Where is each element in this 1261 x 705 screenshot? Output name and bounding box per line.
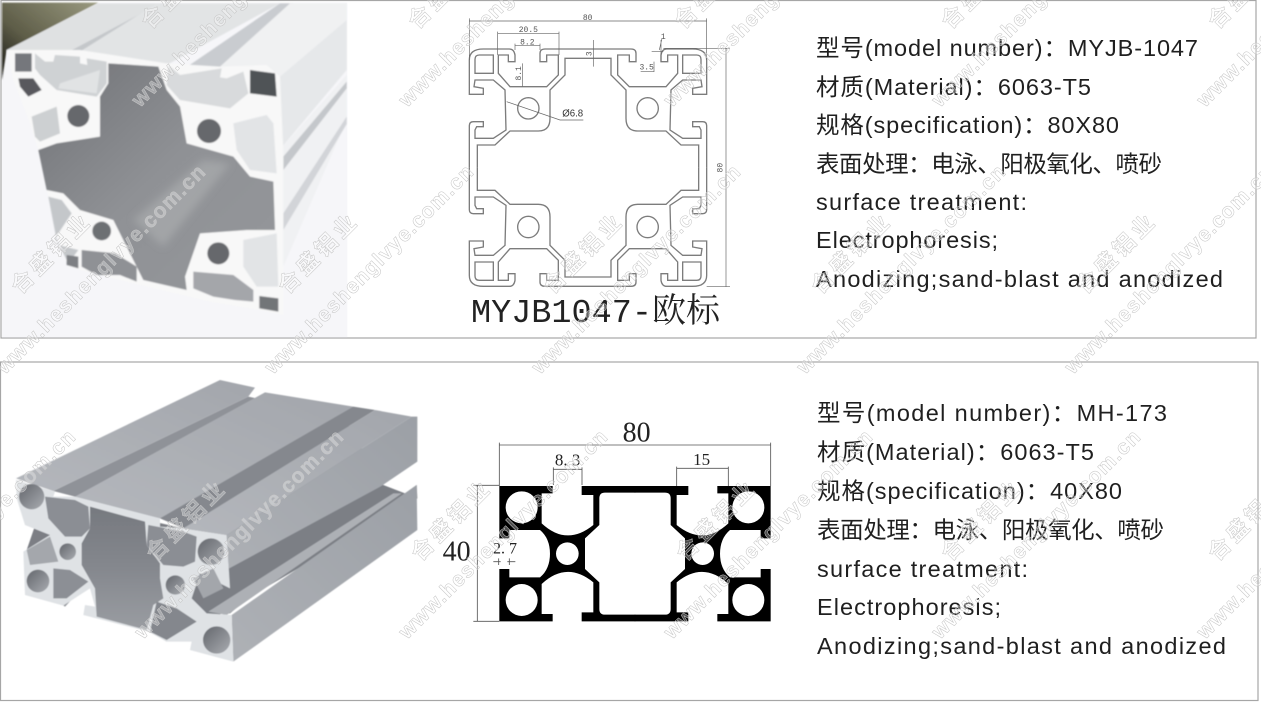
watermark pattern: 合盛铝业	[269, 207, 363, 300]
dimension labels: 3.5	[639, 64, 654, 73]
watermark pattern: www.heshenglvye.com.cn	[527, 161, 745, 379]
watermark pattern: www.heshenglvye.com.cn	[792, 161, 1010, 379]
dimension lines	[473, 443, 771, 621]
text block: bottom specifications	[817, 400, 1226, 659]
central cavity	[38, 63, 275, 290]
watermark pattern: 合盛铝业	[667, 474, 761, 567]
watermark pattern: 合盛铝业	[932, 474, 1026, 567]
watermark pattern: 合盛铝业	[137, 474, 231, 567]
text block: bottom specifications: surface treatment:	[817, 556, 1028, 582]
dimension labels	[443, 417, 710, 568]
text block: top specifications: 表面处理：电泳、阳极氧化、喷砂	[816, 151, 1162, 177]
front face	[16, 480, 233, 662]
profile shape	[499, 486, 771, 621]
text block: bottom specifications: Electrophoresis;	[817, 594, 1001, 620]
dimension labels: 80	[583, 14, 593, 23]
dimension labels: 8. 3	[555, 451, 580, 470]
text block: bottom specifications: 型号(model number)：MH-173	[817, 400, 1167, 426]
photo: 80x80 aluminium profile	[2, 3, 347, 337]
slots and hollow chambers	[35, 53, 107, 97]
watermark pattern: 合盛铝业	[802, 207, 896, 300]
watermark pattern: 合盛铝业	[2, 207, 96, 300]
text block: top specifications: surface treatment:	[816, 189, 1027, 215]
dimension lines	[469, 18, 730, 287]
dimension labels: 80	[717, 163, 726, 172]
dimension labels: 8.1	[515, 66, 524, 81]
text block: bottom specifications: 规格(specification)：40X80	[817, 478, 1122, 504]
dimension labels: 20.5	[519, 26, 538, 35]
drawing caption: MYJB1047-	[471, 295, 652, 333]
technical drawing: MH-173 cross-section	[443, 417, 771, 621]
dimension labels: 8.2	[520, 38, 535, 47]
panel: top product	[1, 0, 1256, 338]
panel: bottom product	[0, 362, 1258, 700]
text block: bottom specifications: Anodizing;sand-blast and anodized	[817, 633, 1226, 659]
cavity light streak	[133, 160, 230, 247]
watermark pattern: www.heshenglvye.com.cn	[659, 426, 877, 644]
drawing caption: 欧标	[652, 283, 721, 332]
dimension labels: Ø6.8	[562, 108, 583, 119]
text block: top specifications: 材质(Material)：6063-T5	[816, 74, 1091, 100]
dimension labels: 1	[661, 33, 666, 42]
text block: bottom specifications: 材质(Material)：6063-T5	[817, 439, 1094, 465]
watermark pattern: www.heshenglvye.com.cn	[260, 161, 478, 379]
watermark pattern: 合盛铝业	[402, 474, 496, 567]
technical drawing: MYJB1047 cross-section	[469, 14, 730, 287]
text block: top specifications	[816, 35, 1223, 292]
lower left rail	[53, 572, 90, 607]
dimension labels: 40	[443, 537, 471, 568]
photo: 40x80 aluminium profile	[16, 380, 417, 662]
dimension labels: 3	[585, 51, 594, 56]
watermark pattern: 合盛铝业	[1067, 207, 1161, 300]
front face	[7, 50, 283, 315]
text block: top specifications: 型号(model number)：MYJB-1047	[816, 35, 1198, 61]
watermark pattern: 合盛铝业	[534, 207, 628, 300]
text block: top specifications: Anodizing;sand-blast and anodized	[816, 266, 1223, 292]
text block: top specifications: Electrophoresis;	[816, 227, 998, 253]
watermark pattern: www.heshenglvye.com.cn	[394, 426, 612, 644]
profile outline	[469, 49, 707, 286]
dimension labels: 15	[693, 450, 710, 469]
text block: bottom specifications: 表面处理：电泳、阳极氧化、喷砂	[817, 517, 1164, 543]
watermark pattern: www.heshenglvye.com.cn	[130, 426, 348, 644]
dimension labels: 80	[623, 417, 651, 448]
profile holes	[19, 484, 230, 654]
text block: top specifications: 规格(specification)：80X80	[816, 112, 1119, 138]
dimension labels	[515, 14, 726, 172]
watermark pattern: www.heshenglvye.com.cn	[927, 426, 1145, 644]
dimension labels: 2. 7	[493, 540, 517, 557]
